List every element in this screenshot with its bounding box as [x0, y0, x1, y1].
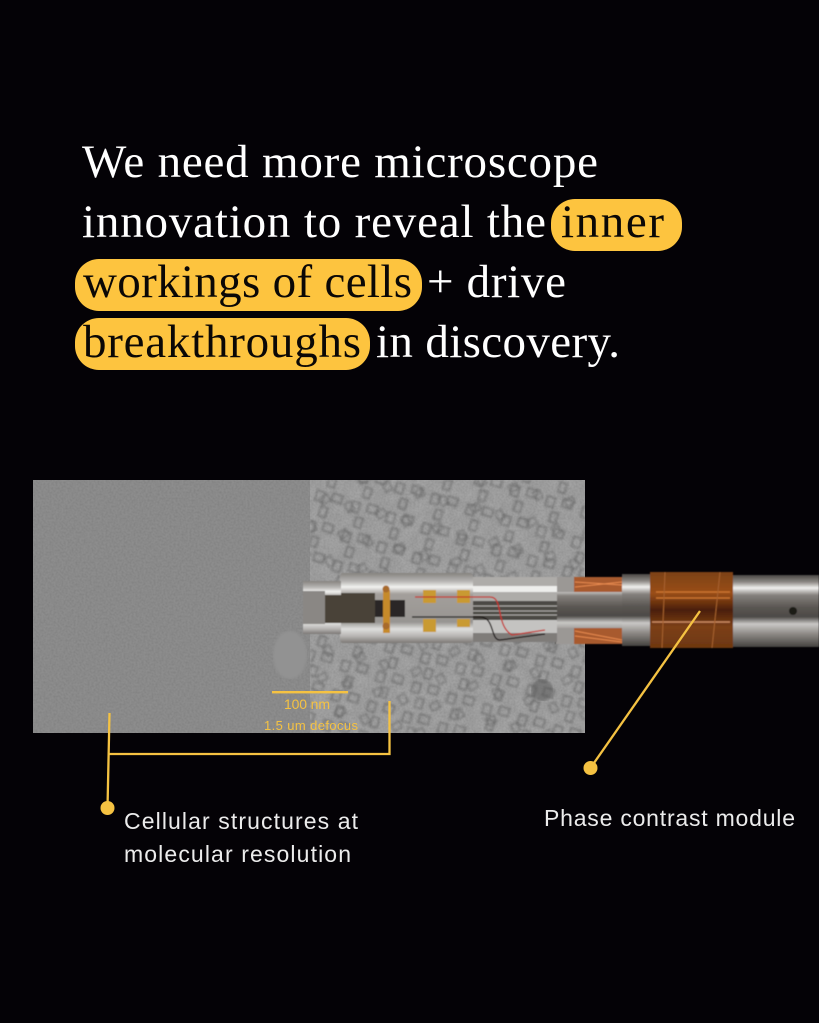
low-defocus micrograph half [33, 480, 310, 733]
callout label: Cellular structures at [124, 808, 359, 834]
high-defocus micrograph half with particles [310, 480, 585, 733]
front nose [303, 581, 341, 634]
callout dot [100, 801, 114, 815]
highlight: inner [551, 199, 682, 251]
headline text: + drive: + drive [427, 256, 566, 308]
callout label: Phase contrast module [544, 805, 795, 831]
headline word: workings of cells: workings of cells [83, 256, 412, 308]
wires [412, 597, 545, 640]
rear tube [733, 575, 819, 647]
wire section [555, 577, 625, 644]
highlight: breakthroughs [75, 318, 370, 370]
micrograph panel [33, 480, 585, 733]
highlight: workings of cells [75, 259, 422, 311]
headline word: breakthroughs: breakthroughs [83, 316, 361, 368]
callout dot [584, 761, 598, 775]
bracket line [108, 701, 390, 808]
headline line 1: We need more microscope [82, 136, 598, 188]
leader line [590, 611, 700, 768]
phase contrast probe [303, 572, 819, 648]
headline text: in discovery: in discovery. [376, 316, 620, 368]
defocus label: 1.5 um defocus [264, 718, 358, 733]
headline line 2: innovation to reveal the [82, 196, 546, 248]
headline [75, 136, 682, 370]
callout: cellular structures bracket [100, 701, 390, 867]
callout label: molecular resolution [124, 841, 351, 867]
scale label: 100 nm [284, 696, 330, 712]
scale bar [272, 691, 348, 693]
headline word: inner: inner [561, 196, 664, 248]
kapton heater band [650, 572, 733, 648]
silver collar [622, 574, 652, 646]
rod section [473, 577, 557, 642]
callout: phase contrast module [544, 611, 795, 831]
main barrel [325, 573, 473, 643]
